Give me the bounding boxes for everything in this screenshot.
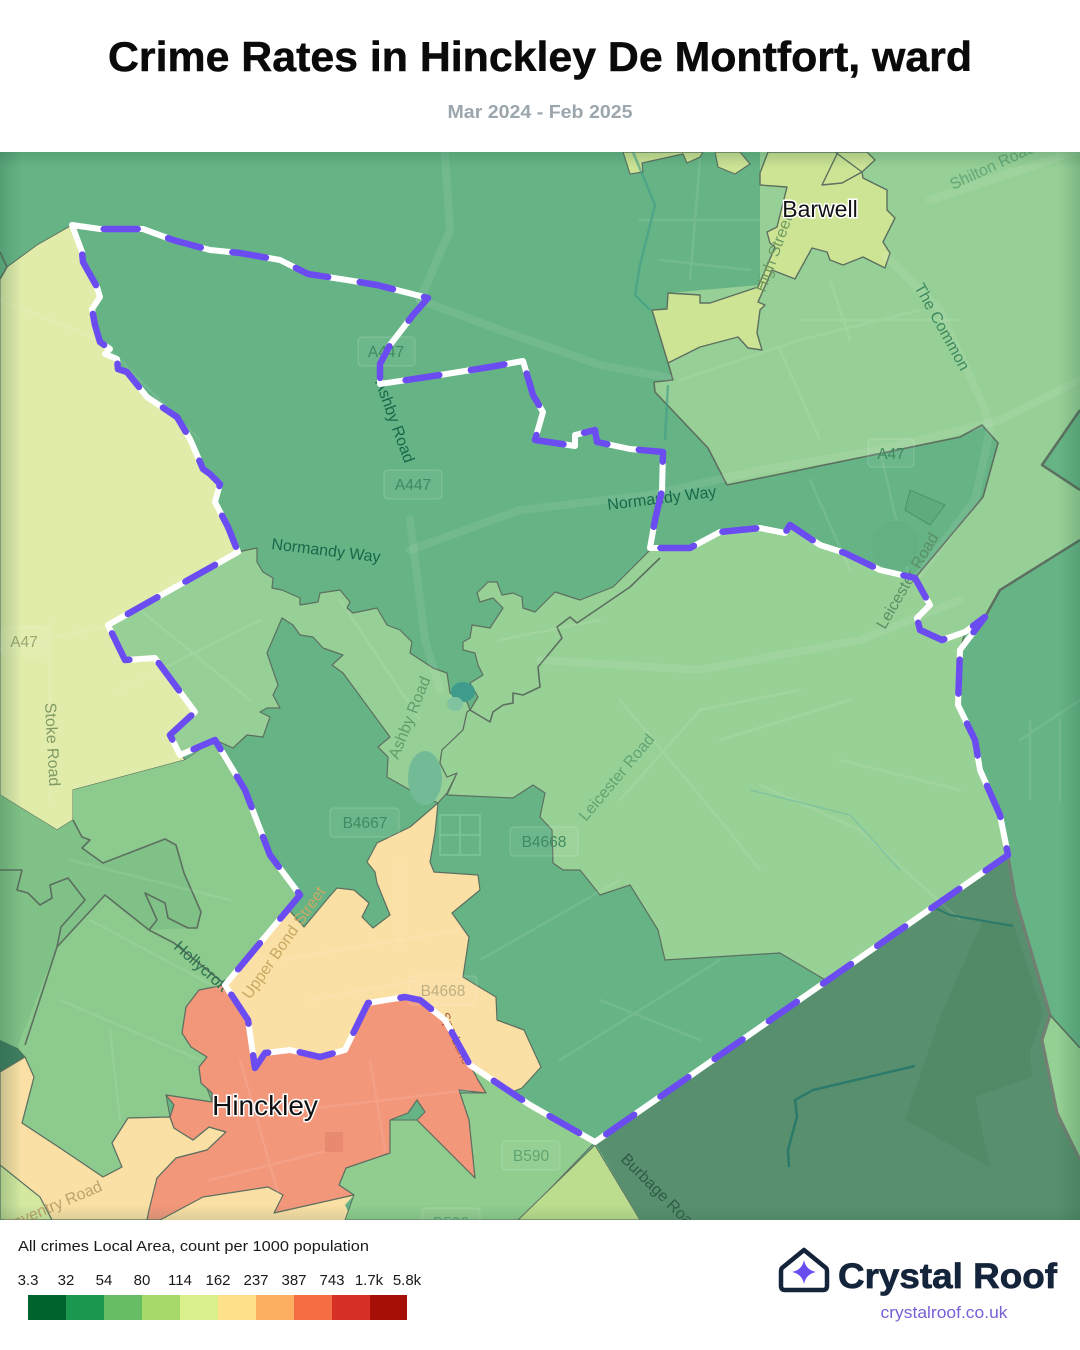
area: south east darkest green — [595, 855, 1080, 1220]
area: bottom left pale orange — [0, 1057, 226, 1220]
area: top small yellow patches — [623, 152, 750, 174]
place label: Barwell: Barwell — [782, 196, 858, 222]
road labels: Stoke Road — [41, 702, 62, 787]
legend tick labels: 114 — [168, 1272, 192, 1289]
road shields — [1, 337, 914, 1237]
website link: crystalroof.co.uk — [880, 1304, 1008, 1322]
road labels: Ashby Road — [386, 674, 434, 761]
road labels: Leicester Road — [576, 731, 658, 825]
area: top right light green — [652, 152, 1080, 640]
road labels: Normandy Way — [271, 536, 381, 566]
shield: B4668 south: B4668 — [421, 983, 465, 1000]
area: Barwell yellow green — [652, 152, 895, 363]
map edge vignette — [0, 152, 1080, 1220]
shield: A447 south — [384, 470, 442, 499]
subtitle: date range: Mar 2024 - Feb 2025 — [448, 101, 632, 122]
shield: A47 west: A47 — [10, 634, 38, 651]
area: south west green — [0, 750, 222, 1176]
water and parks — [325, 152, 1013, 1167]
legend title: All crimes Local Area, count per 1000 population — [18, 1238, 369, 1255]
shield: A447 north: A447 — [368, 344, 404, 361]
legend tick labels: 1.7k — [355, 1272, 384, 1289]
area: far left mid green — [0, 795, 201, 1048]
road labels: Coventry Road — [0, 1178, 105, 1236]
legend tick labels: 387 — [281, 1272, 307, 1289]
place label: Hinckley: Hinckley — [212, 1090, 318, 1121]
area: left pale yellow — [0, 225, 238, 830]
area: Hinckley salmon high crime — [147, 985, 486, 1220]
logo: Crystal Roof — [781, 1250, 1057, 1322]
area: bottom left corner light green — [0, 1165, 52, 1220]
legend tick labels: 80 — [134, 1272, 150, 1289]
legend tick labels: 743 — [319, 1272, 345, 1289]
south east area boundary — [1008, 855, 1080, 1160]
ward boundary: Hinckley De Montfort — [72, 225, 1008, 1142]
logo wordmark: Crystal Roof — [838, 1257, 1057, 1296]
area: subtle field in south east — [905, 920, 1043, 1167]
area: far south east light green — [1042, 1015, 1080, 1160]
area: ward west light green — [108, 548, 470, 803]
road labels: High Street — [753, 213, 796, 294]
road labels — [0, 139, 1038, 1236]
inner boundary line in east ward — [470, 558, 660, 722]
road labels: Spa Lane — [437, 1010, 474, 1067]
road labels: Shilton Road — [948, 139, 1038, 194]
road labels: Ashby Road — [371, 378, 417, 465]
shield: B4668 north: B4668 — [522, 834, 566, 851]
base area: dark green crime band — [0, 152, 1080, 1220]
road labels: Hollycroft — [170, 938, 232, 996]
roads — [0, 150, 1080, 1200]
shield: B590 south — [421, 1208, 481, 1220]
legend tick labels: 5.8k — [393, 1272, 422, 1289]
legend tick labels: 162 — [205, 1272, 231, 1289]
legend tick labels — [18, 1272, 422, 1289]
road labels: Normandy Way — [606, 484, 717, 514]
shield: B590: B590 — [513, 1148, 549, 1165]
area: south centre pale orange — [160, 1187, 354, 1220]
shield: A47 east: A47 — [877, 446, 905, 463]
title: Crime Rates in Hinckley De Montfort, ward — [108, 33, 972, 80]
shield: B4667: B4667 — [343, 815, 387, 832]
shield: B4668 south — [409, 976, 477, 1005]
icon: house with star — [781, 1250, 827, 1290]
shield: A447 north — [358, 337, 415, 366]
area: southern yellow green strip — [518, 1145, 640, 1220]
legend colour scale — [28, 1295, 407, 1320]
area: south green — [339, 1065, 595, 1220]
shield: A47 west — [1, 627, 48, 656]
shield: B4667 — [330, 808, 399, 837]
legend — [18, 1238, 422, 1320]
road labels: Upper Bond Street — [239, 884, 330, 1002]
shield: A47 east — [868, 439, 914, 467]
shield: B4668 north — [510, 827, 578, 856]
road labels: Leicester Road — [874, 530, 942, 632]
area: dark patch bottom left — [0, 1040, 25, 1072]
road labels: The Common — [911, 281, 972, 374]
legend tick labels: 237 — [243, 1272, 269, 1289]
legend tick labels: 3.3 — [18, 1272, 38, 1289]
shield: A447 south: A447 — [395, 477, 431, 494]
shield: B590 south: B590 — [433, 1215, 469, 1232]
area: Town centre pale orange — [224, 803, 541, 1092]
road labels: Burbage Road — [617, 1151, 702, 1236]
boundary lines between areas — [0, 252, 1080, 1048]
legend tick labels: 32 — [58, 1272, 74, 1289]
legend tick labels: 54 — [96, 1272, 112, 1289]
shield: B590 — [502, 1141, 560, 1170]
area: ward east light green — [440, 525, 1008, 981]
